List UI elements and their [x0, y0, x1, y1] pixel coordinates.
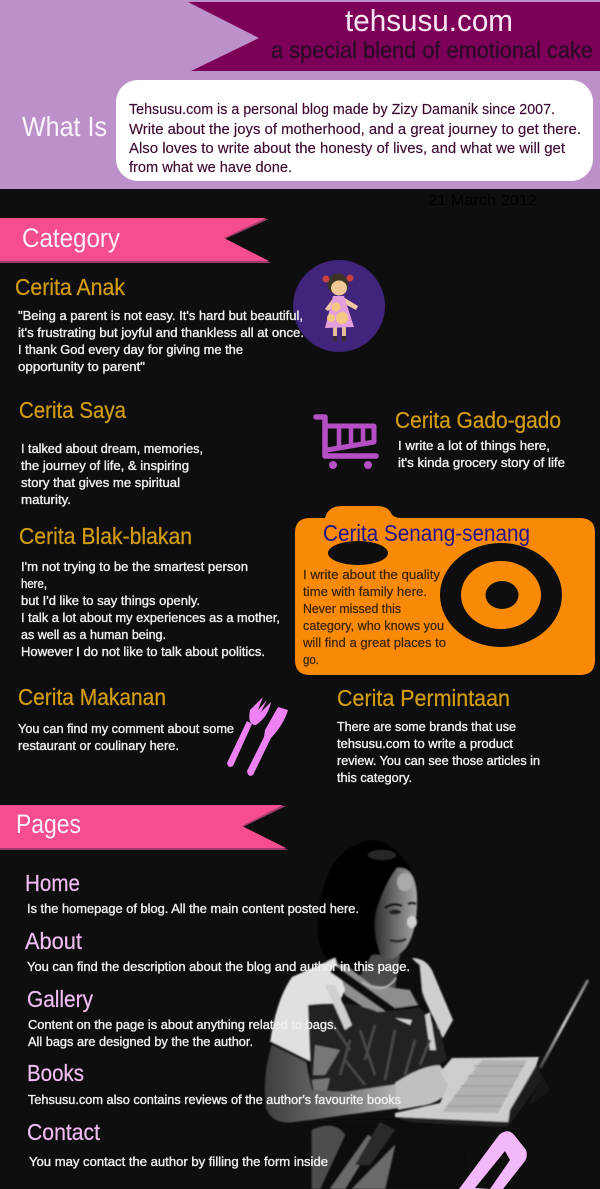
heading: Cerita Gado-gado: [395, 407, 561, 433]
page: home: Home: [25, 870, 80, 896]
text: here,: [21, 576, 47, 591]
page: about: [25, 928, 410, 974]
heading: Cerita Blak-blakan: [19, 523, 192, 549]
text: will find a great places to: [302, 635, 446, 650]
text: review. You can see those articles in: [337, 753, 540, 768]
text: You can find my comment about some: [18, 721, 234, 736]
text: There are some brands that use: [337, 719, 516, 734]
icon: shopping cart: [316, 417, 376, 469]
panel: cerita senang-senang camera: [295, 506, 595, 675]
category ribbon: [0, 218, 271, 263]
text: I talk a lot about my experiences as a mother,: [21, 610, 280, 625]
text: it's kinda grocery story of life: [398, 455, 565, 470]
heading: Cerita Permintaan: [337, 685, 510, 711]
photo: author with laptop: [265, 840, 588, 1189]
icon: pink shape at bottom: [459, 1131, 527, 1189]
text: go.: [303, 652, 319, 667]
text: but I'd like to say things openly.: [21, 593, 200, 608]
text: story that gives me spiritual: [21, 475, 180, 490]
page: gallery: [27, 986, 337, 1049]
text: [337, 719, 540, 785]
text: [398, 438, 565, 470]
text: Never missed this: [303, 601, 401, 616]
pages ribbon: [0, 805, 288, 850]
text: category, who knows you: [303, 618, 444, 633]
description bubble: Write about the joys of motherhood, and a great journey to get there.: [129, 121, 581, 138]
text: [21, 559, 280, 659]
text: [18, 308, 304, 374]
page: gallery: All bags are designed by the the author.: [28, 1034, 253, 1049]
text: opportunity to parent": [18, 359, 145, 374]
page: contact: [27, 1119, 328, 1169]
heading: Cerita Makanan: [18, 684, 166, 710]
pages list: [25, 870, 410, 1169]
panel: cerita permintaan: [337, 685, 540, 785]
text: "Being a parent is not easy. It's hard but beautiful,: [18, 308, 303, 323]
text: the journey of life, & inspiring: [21, 458, 189, 473]
icon: fork and knife: [227, 697, 288, 776]
text: I talked about dream, memories,: [21, 441, 203, 456]
panel: cerita saya: [19, 397, 203, 507]
what is label: What Is: [22, 111, 107, 142]
text: I thank God every day for giving me the: [18, 342, 243, 357]
text: as well as a human being.: [21, 627, 166, 642]
heading: Cerita Senang-senang: [323, 520, 530, 546]
text: I'm not trying to be the smartest person: [21, 559, 248, 574]
description bubble: from what we have done.: [129, 159, 292, 176]
page: books: Books: [27, 1060, 84, 1086]
page: home: Is the homepage of blog. All the main content posted here.: [27, 901, 359, 916]
text: I write about the quality: [303, 567, 440, 582]
panel: cerita anak: [15, 260, 385, 374]
page: books: Tehsusu.com also contains reviews of the author's favourite books: [28, 1092, 401, 1107]
text: restaurant or coulinary here.: [18, 738, 179, 753]
text: [18, 721, 234, 753]
page: gallery: Gallery: [27, 986, 93, 1012]
date: 21 March 2012: [428, 193, 537, 209]
description bubble: Also loves to write about the honesty of lives, and what we will get: [129, 140, 566, 157]
description bubble: [116, 80, 593, 181]
page: about: You can find the description about the blog and author in this page.: [27, 959, 410, 974]
page: gallery: Content on the page is about anything related to bags.: [28, 1017, 337, 1032]
panel: cerita blak-blakan: [19, 523, 280, 659]
panel: cerita gado-gado: [316, 407, 565, 470]
description bubble: Tehsusu.com is a personal blog made by Zizy Damanik since 2007.: [129, 101, 555, 118]
page: home: [25, 870, 359, 916]
category heading: Category: [22, 223, 120, 253]
text: I write a lot of things here,: [398, 438, 550, 453]
text: [21, 441, 203, 507]
viewfinder: [328, 541, 388, 565]
girl avatar: [293, 260, 385, 352]
page: contact: You may contact the author by filling the form inside: [29, 1154, 328, 1169]
title banner: [188, 2, 600, 71]
page: books: [27, 1060, 401, 1107]
site title: tehsusu.com: [345, 3, 513, 38]
text: maturity.: [21, 492, 71, 507]
camera body: [295, 506, 595, 675]
lens: [440, 543, 562, 647]
heading: Cerita Saya: [19, 397, 126, 423]
page: contact: Contact: [27, 1119, 101, 1145]
pages heading: Pages: [16, 809, 81, 839]
text: this category.: [337, 770, 412, 785]
heading: Cerita Anak: [15, 274, 125, 300]
page: about: About: [25, 928, 83, 954]
panel: cerita makanan: [18, 684, 288, 776]
header panel: [0, 0, 600, 189]
text: [302, 567, 446, 667]
text: time with family here.: [303, 584, 427, 599]
text: tehsusu.com to write a product: [337, 736, 513, 751]
text: However I do not like to talk about politics.: [21, 644, 265, 659]
text: it's frustrating but joyful and thankless all at once.: [18, 325, 304, 340]
